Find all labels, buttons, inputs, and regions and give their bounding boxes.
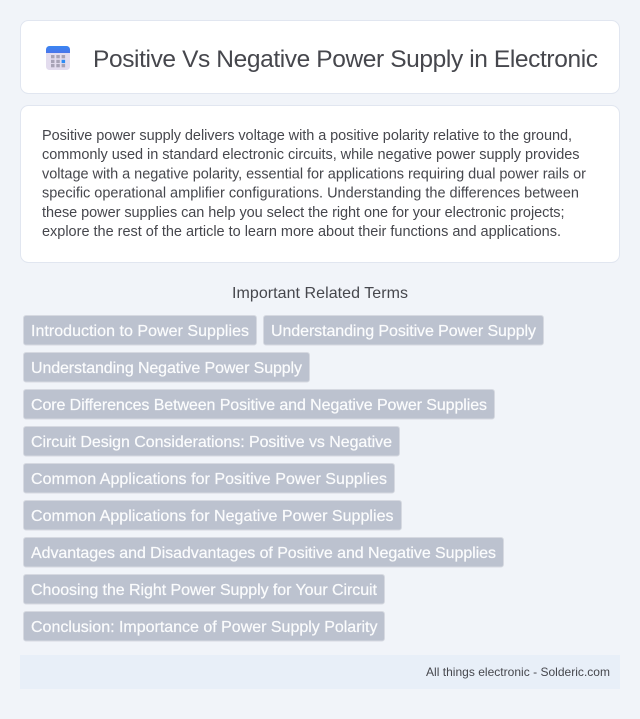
tag: Conclusion: Importance of Power Supply Polarity: [31, 619, 378, 636]
panel: intro text: voltage with a negative polarity, essential for applications requiring dual power rails or: [42, 166, 586, 182]
tag: Core Differences Between Positive and Negative Power Supplies: [31, 397, 487, 414]
panel: intro text: explore the rest of the article to learn more about their functions and applications.: [42, 224, 561, 240]
heading: related terms: Important Related Terms: [232, 285, 408, 302]
tag: [24, 390, 494, 419]
panel: intro text: Positive power supply delivers voltage with a positive polarity relative to the ground,: [42, 128, 572, 144]
tag list: [24, 316, 544, 641]
tag: Advantages and Disadvantages of Positive and Negative Supplies: [31, 545, 496, 562]
panel: intro text: these power supplies can help you select the right one for your electronic projects;: [42, 205, 564, 221]
tag: [24, 464, 394, 493]
tag: [24, 426, 400, 456]
tag: [264, 316, 544, 345]
panel: intro text: commonly used in standard electronic circuits, while negative power supply provides: [42, 147, 580, 163]
header panel: [20, 20, 620, 94]
icon: calendar: [46, 46, 70, 70]
tag: [24, 612, 384, 641]
title: Positive Vs Negative Power Supply in Electronic: [93, 46, 598, 73]
tag: [24, 538, 504, 567]
footer: All things electronic - Solderic.com: [426, 665, 610, 679]
tag: Understanding Negative Power Supply: [31, 360, 302, 377]
tag: Choosing the Right Power Supply for Your Circuit: [31, 582, 378, 599]
panel: intro text: specific operational amplifier configurations. Understanding the differences between: [42, 186, 579, 202]
footer: [20, 655, 620, 689]
tag: [24, 316, 256, 345]
tag: Common Applications for Negative Power Supplies: [31, 508, 394, 525]
tag: Understanding Positive Power Supply: [271, 323, 536, 340]
tag: [24, 574, 384, 604]
tag: [24, 352, 310, 382]
tag: Circuit Design Considerations: Positive vs Negative: [31, 434, 392, 451]
tag: [24, 500, 402, 530]
panel: intro text: [20, 106, 620, 262]
tag: Introduction to Power Supplies: [31, 323, 249, 340]
tag: Common Applications for Positive Power Supplies: [31, 471, 387, 488]
